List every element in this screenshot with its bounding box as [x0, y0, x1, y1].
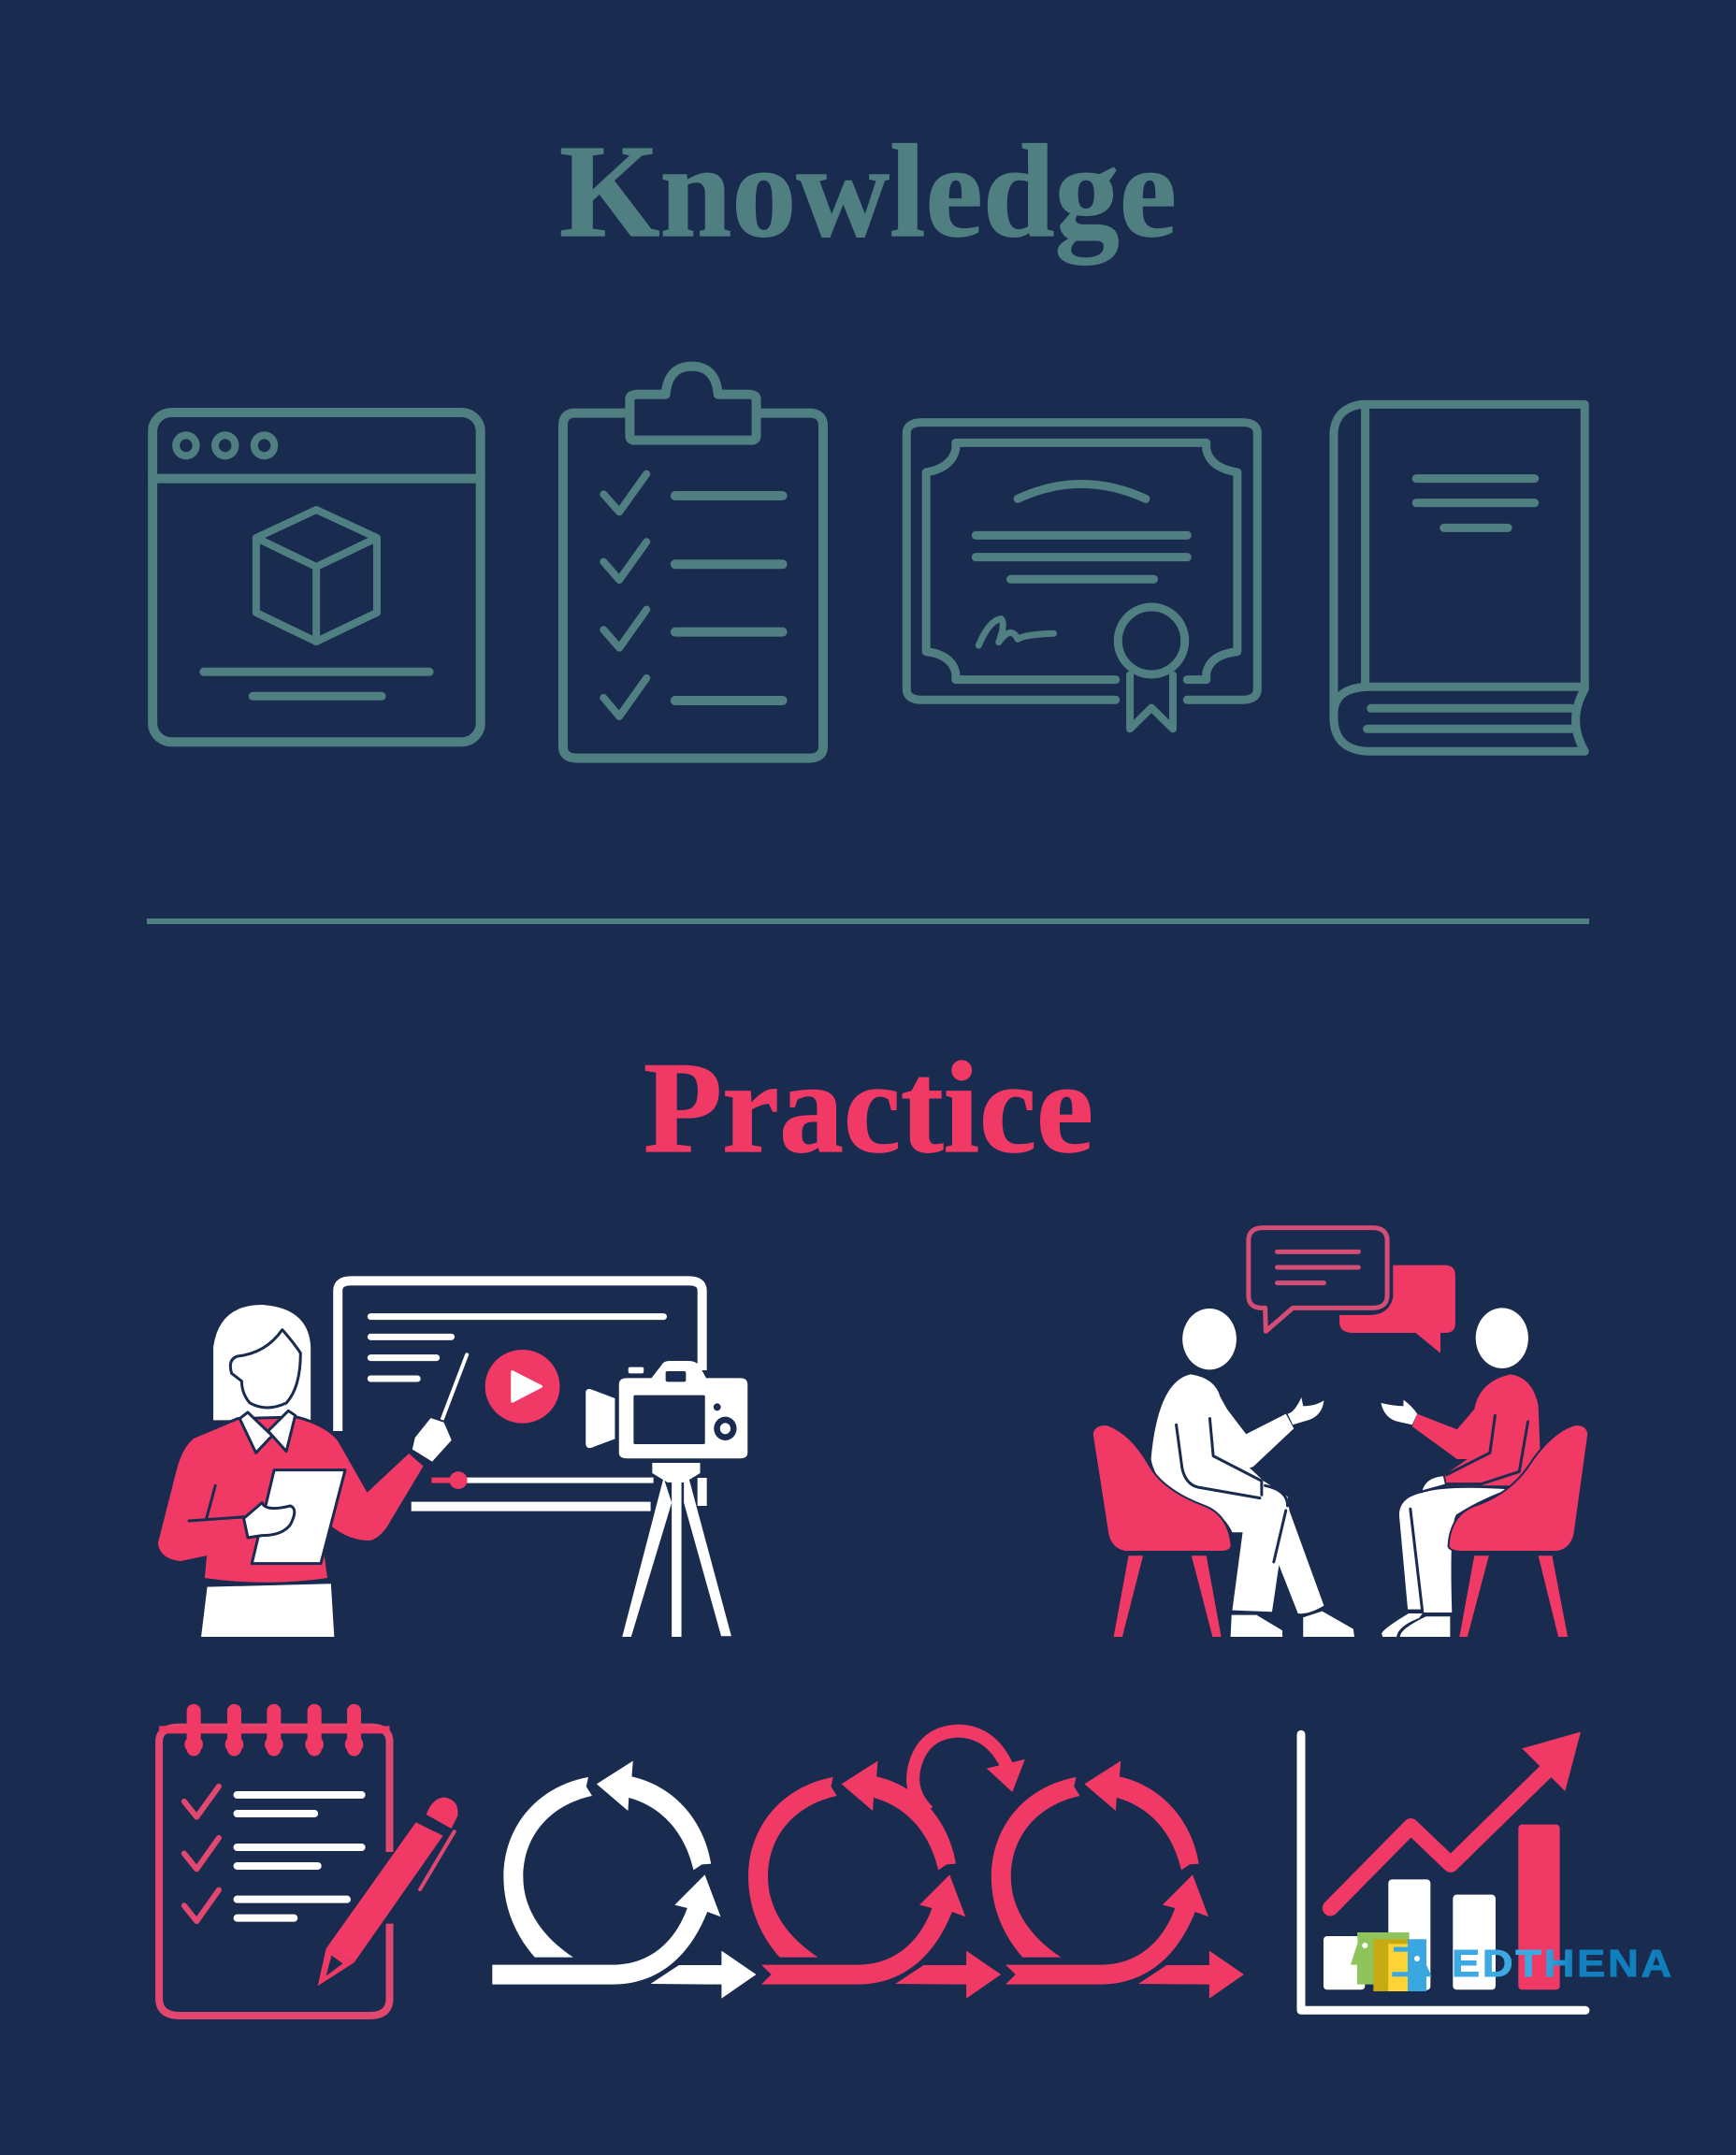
play button [485, 1350, 559, 1424]
title: Knowledge: Knowledge [559, 117, 1177, 265]
icon: white sprint loop arrows [492, 1761, 756, 1999]
icon: two people in conversation [1092, 1228, 1588, 1637]
icon: closed book [1334, 404, 1584, 751]
presenter with pointer and tablet [156, 1305, 467, 1637]
outlined speech bubble [1249, 1228, 1387, 1331]
wordmark: EDTHENA [1452, 1943, 1674, 1986]
arrow: connector between red loops [913, 1731, 1025, 1812]
icon: spiral notebook with pen [159, 1711, 458, 2016]
icon: teacher presenting to camera [156, 1280, 747, 1637]
pen [318, 1798, 458, 1986]
camera on tripod [586, 1361, 747, 1637]
icon: certificate with ribbon seal [906, 423, 1257, 729]
right person on chair [1381, 1308, 1588, 1637]
divider [147, 918, 1589, 924]
bar chart with rising arrow [1301, 1732, 1585, 2010]
icon: first red sprint loop arrows [748, 1761, 1001, 1999]
icon: second red sprint loop arrows [991, 1761, 1244, 1999]
title: Practice: Practice [644, 1035, 1093, 1180]
left person on chair [1092, 1309, 1354, 1637]
logo: Edthena watermark [1351, 1932, 1674, 1991]
filled speech bubble [1339, 1266, 1455, 1353]
icon: clipboard checklist [563, 367, 823, 759]
video screen [338, 1280, 702, 1507]
icon: browser window with 3D cube [152, 412, 481, 742]
logo mark [1351, 1932, 1432, 1991]
